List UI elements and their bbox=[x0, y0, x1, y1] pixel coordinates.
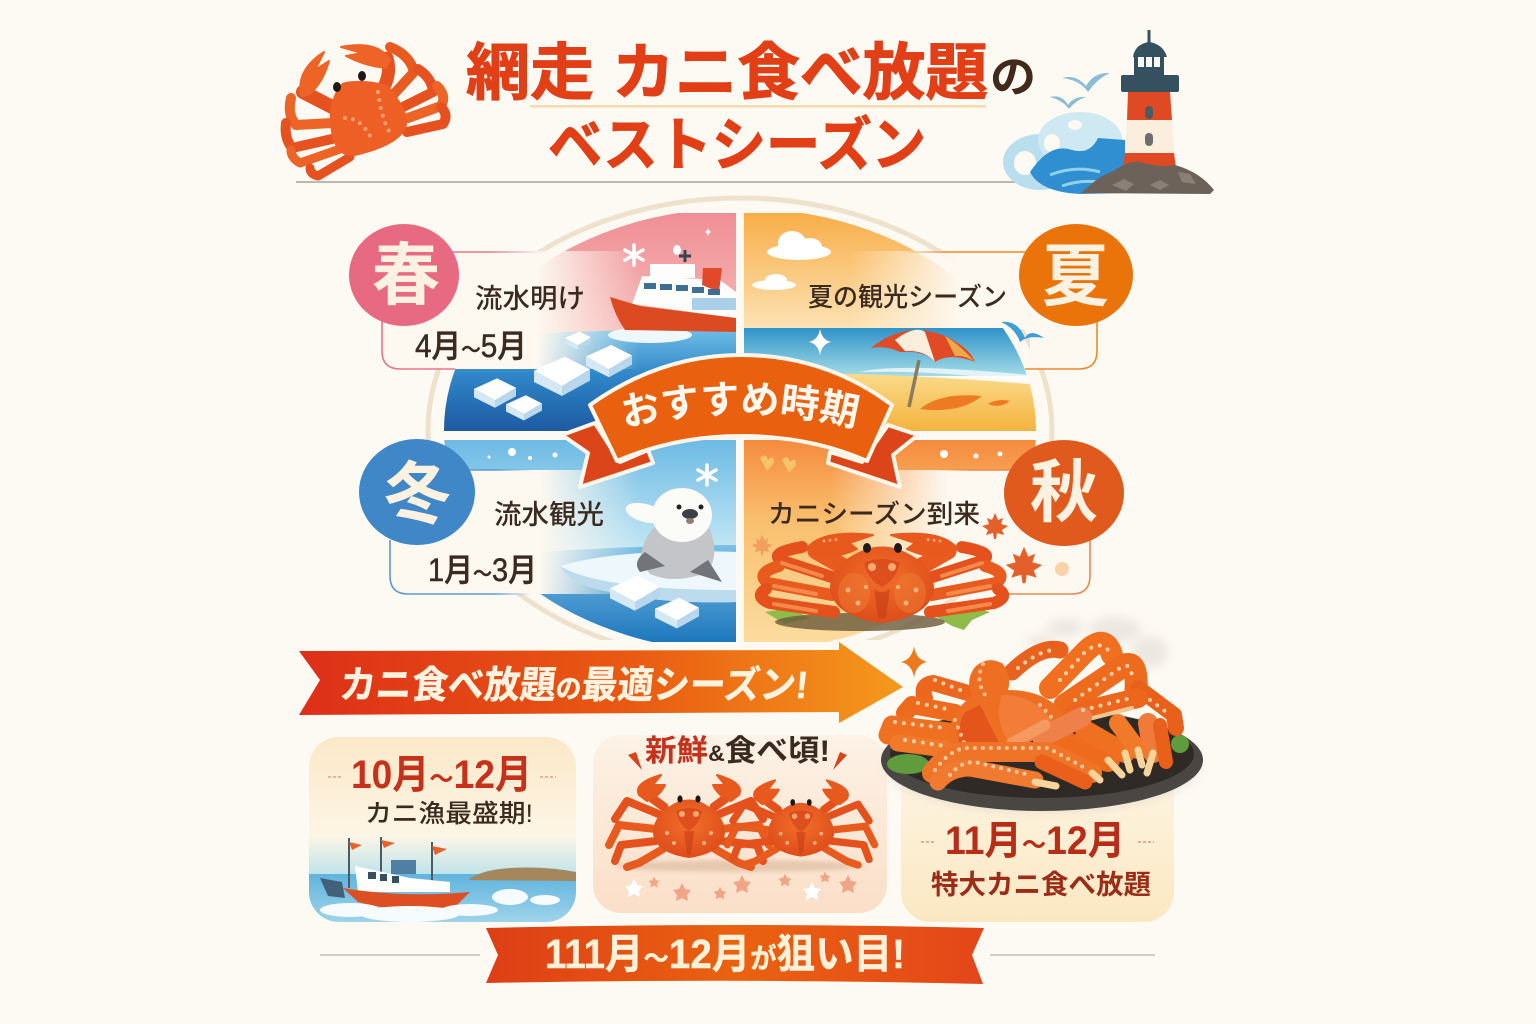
icon: petals bbox=[625, 872, 857, 901]
plate bbox=[886, 720, 1198, 812]
icon: summer badge bbox=[1019, 224, 1133, 326]
title line 1: 網走 bbox=[466, 39, 594, 108]
accent ticks bbox=[628, 752, 847, 770]
icon: spring snow bbox=[625, 228, 712, 265]
panel: summer background bbox=[744, 213, 1005, 331]
lighthouse rock bbox=[1081, 162, 1214, 194]
illustration: crab platter bbox=[881, 617, 1203, 812]
text: summer title: 夏の観光シーズン bbox=[808, 282, 1007, 312]
icon: birds bbox=[1050, 73, 1110, 109]
icon: seal bbox=[623, 488, 722, 582]
icon: autumn crab bbox=[761, 534, 1003, 623]
crab legs on top bbox=[895, 645, 1170, 786]
icon: spring badge bbox=[349, 224, 459, 326]
icon: winter badge: 冬 bbox=[384, 457, 451, 533]
text: winter title: 流水観光 bbox=[494, 500, 604, 530]
icon: beach umbrella bbox=[871, 330, 975, 407]
icon: clouds bbox=[752, 231, 831, 290]
icon: sparkle bbox=[901, 646, 927, 678]
crab legs heap bbox=[888, 643, 1176, 775]
dashes bbox=[921, 841, 1154, 843]
icon: wave bbox=[1003, 112, 1125, 194]
icon: ice floe bbox=[560, 551, 736, 628]
heading: peak months: 11月〜12月 bbox=[945, 819, 1125, 863]
icon: icebreaker ship bbox=[610, 250, 736, 332]
panel: autumn background bbox=[744, 440, 1040, 642]
icon: autumn hearts bbox=[760, 455, 796, 473]
ribbon body bbox=[590, 355, 892, 461]
arrow text: カニ食べ放題の最適シーズン! bbox=[338, 664, 810, 707]
winter band dots bbox=[488, 448, 558, 460]
shadow bbox=[615, 860, 865, 872]
icon: crab small bbox=[727, 780, 875, 865]
garnish bbox=[887, 735, 1189, 774]
icon: autumn badge bbox=[1004, 440, 1124, 546]
decorative ring bbox=[428, 198, 1052, 662]
bottom ribbon bbox=[486, 925, 984, 984]
panel: summer sea bbox=[744, 328, 1040, 376]
lighthouse tower bbox=[1121, 30, 1179, 168]
panel: november to december bbox=[901, 760, 1174, 922]
arrow banner: best season bbox=[299, 642, 903, 723]
title line 1: カニ食べ放題 bbox=[612, 39, 988, 108]
header divider bbox=[296, 181, 1016, 183]
icon: spring badge: 春 bbox=[372, 238, 440, 314]
title line 1: の bbox=[990, 53, 1036, 102]
steam bbox=[1027, 617, 1168, 668]
footer rules bbox=[320, 954, 1155, 956]
heading: fishing months: 10月〜12月 bbox=[351, 753, 532, 797]
panel: winter label bbox=[390, 470, 640, 594]
title line 2: ベストシーズン bbox=[548, 113, 926, 178]
panel: fresh and in season bbox=[593, 735, 887, 913]
text: spring months: 4月〜5月 bbox=[415, 328, 527, 364]
icon: winter snowflake bbox=[698, 465, 716, 485]
autumn band dots bbox=[940, 450, 1002, 458]
text: all you can eat: 特大カニ食べ放題 bbox=[931, 870, 1151, 900]
icon: lighthouse with wave bbox=[1003, 30, 1214, 194]
mask under ring bbox=[296, 640, 1196, 670]
panel: october to december bbox=[309, 737, 576, 922]
icon: leaf on sand bbox=[920, 395, 1010, 410]
panel: winter background bbox=[444, 440, 736, 642]
seasonal wheel foreground bbox=[474, 228, 1040, 629]
icon: summer badge: 夏 bbox=[1042, 239, 1109, 315]
ribbon tails bbox=[562, 423, 918, 487]
panel: spring background bbox=[444, 213, 736, 431]
ribbon text: おすすめ時期 bbox=[623, 382, 860, 428]
icon: winter badge bbox=[359, 439, 475, 545]
surf line bbox=[860, 368, 1029, 383]
center ribbon: recommended period bbox=[560, 353, 920, 489]
panel: summer beach bbox=[842, 374, 1036, 431]
dashes bbox=[328, 776, 556, 778]
title line 1 bbox=[466, 39, 1036, 108]
text: peak fishing: カニ漁最盛期! bbox=[365, 800, 533, 828]
panel: autumn label bbox=[768, 470, 1090, 594]
text: winter months: 1月〜3月 bbox=[428, 552, 537, 588]
icon: autumn badge: 秋 bbox=[1030, 455, 1098, 531]
icon: blue bird bbox=[1001, 322, 1044, 342]
ribbon text: 111月〜12月が狙い目! bbox=[545, 931, 905, 977]
icon: ice floes bbox=[474, 327, 692, 420]
icon: crab large bbox=[609, 775, 769, 867]
title underline bbox=[530, 105, 986, 108]
seasonal wheel backgrounds bbox=[444, 213, 1040, 642]
icon: sparkle bbox=[809, 329, 831, 355]
text: spring title: 流水明け bbox=[475, 284, 585, 314]
illustration: fishing boat bbox=[309, 835, 576, 922]
crab carapace bbox=[949, 660, 1063, 748]
panel: summer label bbox=[808, 251, 1097, 369]
panel: spring label bbox=[382, 251, 640, 369]
icon: crab left of title bbox=[286, 45, 446, 176]
icon: leaves under autumn crab bbox=[765, 608, 990, 631]
icon: maple leaves bbox=[752, 513, 1069, 583]
text: autumn title: カニシーズン到来 bbox=[768, 499, 980, 529]
heading: fresh season: 新鮮&食べ頃! bbox=[645, 735, 830, 768]
